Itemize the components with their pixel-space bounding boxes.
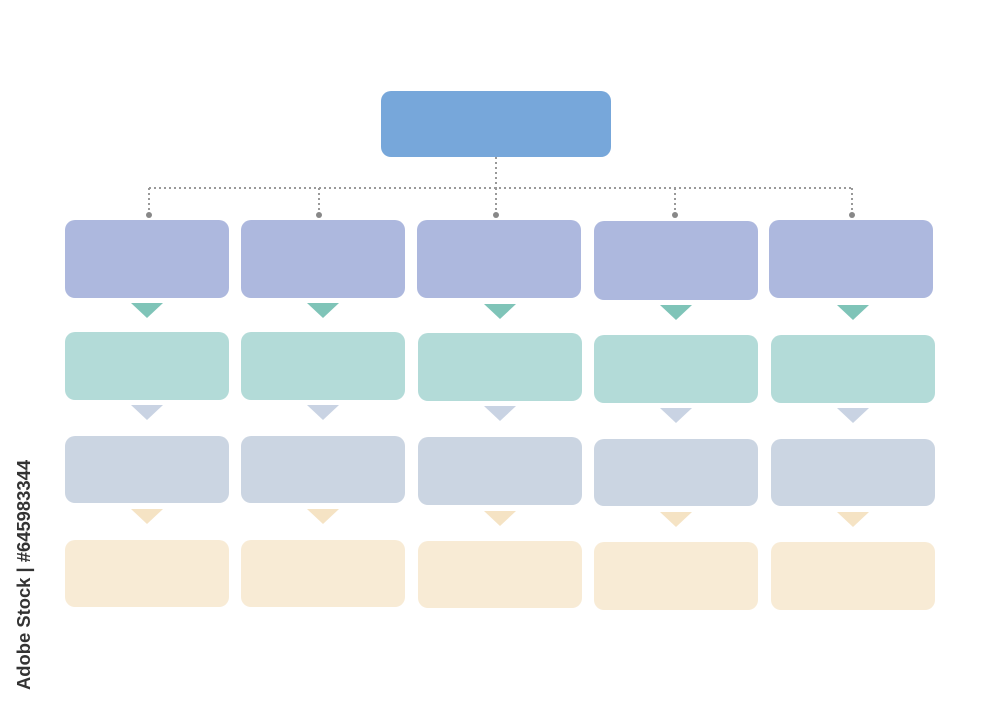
row 3 arrows bbox=[131, 509, 869, 527]
row 3 boxes bbox=[65, 436, 935, 506]
row 4 boxes bbox=[65, 540, 935, 610]
row 2 arrows bbox=[131, 405, 869, 423]
watermark id text: Adobe Stock | #645983344 bbox=[13, 459, 34, 690]
row 2 boxes bbox=[65, 332, 935, 403]
row 1 boxes bbox=[65, 220, 933, 300]
row 1 arrows bbox=[131, 303, 869, 320]
connectors bbox=[149, 157, 852, 214]
root box bbox=[381, 91, 611, 157]
